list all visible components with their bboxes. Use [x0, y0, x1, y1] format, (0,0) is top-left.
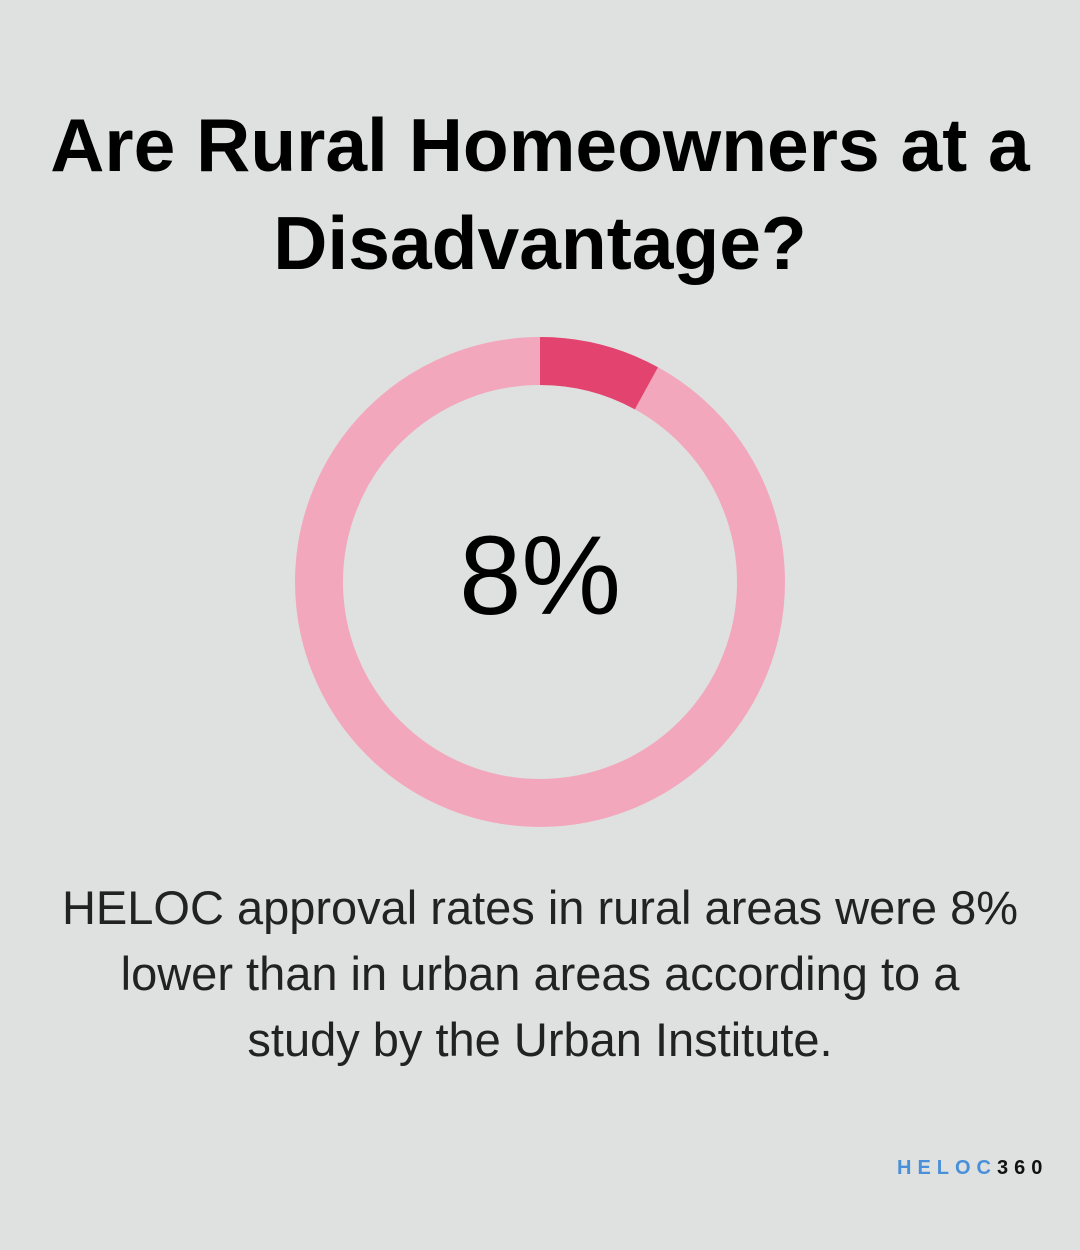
- description text: HELOC approval rates in rural areas were 8%: [62, 881, 1018, 934]
- description text: study by the Urban Institute.: [247, 1013, 833, 1066]
- description text: lower than in urban areas according to a: [121, 947, 959, 1000]
- logo: HELOC360: [897, 1157, 1048, 1179]
- description text: [62, 881, 1018, 1066]
- title: Are Rural Homeowners at a: [50, 103, 1030, 187]
- donut chart: 8%: [459, 513, 621, 638]
- title: [50, 103, 1030, 285]
- title: Disadvantage?: [273, 201, 807, 285]
